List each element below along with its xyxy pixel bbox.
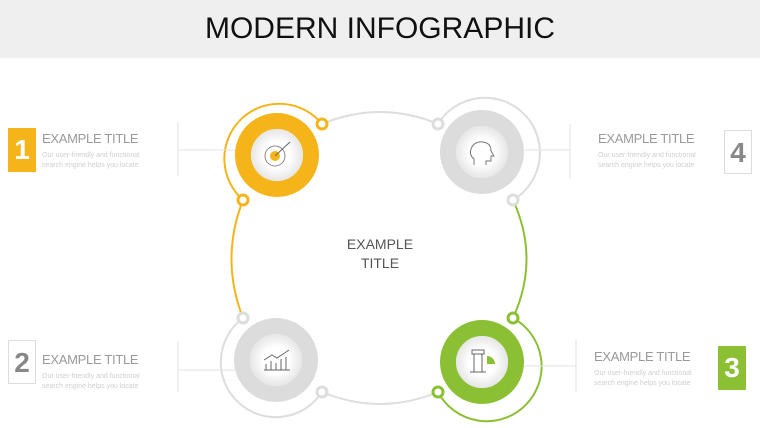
item 1 xyxy=(8,128,140,172)
text: Our user-friendly and functional search engine helps you locate xyxy=(42,373,140,390)
text: 1 xyxy=(14,134,30,165)
text: EXAMPLE TITLE xyxy=(42,352,138,367)
dots xyxy=(238,119,518,397)
circle 3 xyxy=(448,328,516,396)
text: Our user-friendly and functional search engine helps you locate xyxy=(594,370,692,387)
text: Our user-friendly and functional search engine helps you locate xyxy=(42,152,140,169)
text: 4 xyxy=(730,137,746,168)
item 4 xyxy=(598,130,752,174)
title: MODERN INFOGRAPHIC xyxy=(205,12,555,45)
circle 1 xyxy=(243,121,311,189)
item 3 xyxy=(594,346,746,390)
text: EXAMPLE TITLE xyxy=(42,131,138,146)
item 2 xyxy=(8,340,140,390)
text: Our user-friendly and functional search engine helps you locate xyxy=(598,152,696,169)
text: EXAMPLE TITLE xyxy=(598,131,694,146)
connector lines xyxy=(178,122,576,392)
diagram: TITLE xyxy=(361,255,399,271)
text: 2 xyxy=(14,347,30,378)
text: EXAMPLE TITLE xyxy=(594,349,690,364)
title xyxy=(0,0,760,58)
circle 4 xyxy=(448,118,516,186)
text: 3 xyxy=(724,352,740,383)
center title: EXAMPLE xyxy=(347,236,413,252)
circle 2 xyxy=(242,326,310,394)
